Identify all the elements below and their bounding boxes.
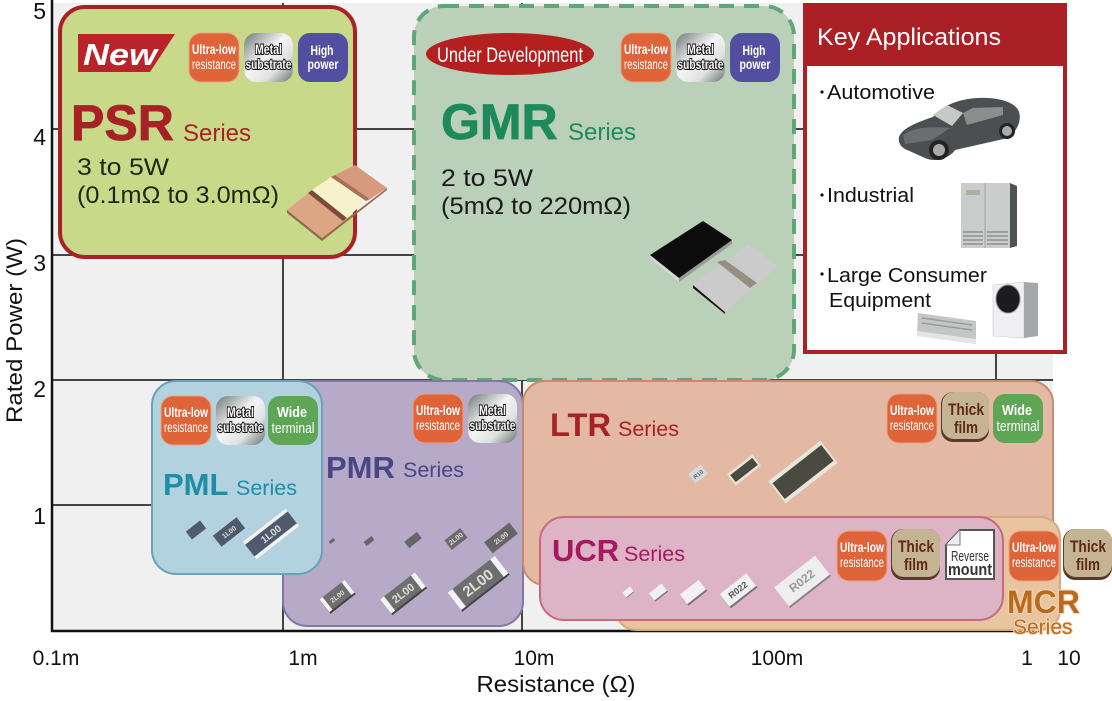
- badge: wide terminal: terminal: [996, 418, 1040, 435]
- x axis tick labels: 0.1m: [33, 647, 79, 670]
- text: GMR ratings: [441, 165, 631, 220]
- badge: ultra-low resistance: Ultra-low: [416, 403, 460, 418]
- panel: PML series: [152, 381, 322, 574]
- badge: metal substrate: substrate: [470, 418, 516, 433]
- y axis tick labels: 3: [33, 250, 46, 276]
- badge: high power: High: [310, 43, 334, 58]
- panel: PSR series: [60, 7, 387, 257]
- y axis title: Rated Power (W): [2, 238, 27, 423]
- heading: LTR Series: [550, 407, 679, 443]
- image: PMR chips: 2L00: [448, 532, 465, 547]
- image: PMR chips: 2L00: [460, 566, 497, 601]
- text: industrial: Industrial: [827, 184, 914, 207]
- badge: reverse mount: [946, 530, 994, 579]
- heading: GMR Series: [441, 94, 636, 150]
- text: large consumer equipment: [820, 264, 987, 312]
- image: PML chips: 1L00: [259, 523, 284, 546]
- panel: LTR series: [523, 381, 1053, 585]
- text: automotive: Automotive: [827, 81, 935, 104]
- image: GMR components: [650, 221, 778, 314]
- badge: ultra-low resistance: [413, 394, 463, 443]
- heading: PSR Series: PSR: [71, 95, 174, 151]
- badge: ultra-low resistance: [1009, 531, 1059, 581]
- badge: ultra-low resistance: [887, 394, 937, 443]
- badge: ultra-low resistance: Ultra-low: [1012, 540, 1056, 555]
- heading: GMR Series: Series: [568, 119, 636, 146]
- icon: washing machine: [993, 282, 1038, 338]
- heading: GMR Series: GMR: [441, 94, 558, 150]
- heading: LTR Series: Series: [618, 417, 679, 441]
- heading: PSR Series: Series: [183, 120, 251, 147]
- badge: wide terminal: [268, 396, 318, 445]
- panel: MCR series: [616, 517, 1112, 639]
- text: PSR ratings: 3 to 5W: [77, 154, 169, 181]
- image: UCR chips: [622, 556, 831, 608]
- heading: MCR Series: Series: [1013, 616, 1073, 639]
- x axis tick labels: 1: [1021, 647, 1033, 670]
- badge: high power: power: [308, 57, 339, 72]
- heading: MCR Series: [1007, 584, 1080, 639]
- heading: MCR Series: MCR: [1007, 584, 1080, 620]
- image: LTR chips: [688, 441, 838, 503]
- icon: air conditioner: [917, 313, 976, 344]
- heading: PML Series: PML: [163, 467, 228, 502]
- badge: metal substrate: [676, 33, 725, 82]
- badge: wide terminal: Wide: [1002, 402, 1032, 419]
- heading: PMR Series: PMR: [326, 450, 395, 485]
- y axis tick labels: 2: [33, 376, 46, 402]
- badge: ultra-low resistance: Ultra-low: [164, 405, 208, 420]
- heading: PML Series: Series: [236, 476, 297, 500]
- badge: metal substrate: [244, 33, 293, 82]
- image: PML chips: 1L00: [221, 525, 238, 540]
- image: PMR chips: 2L00: [493, 531, 510, 546]
- text: PSR ratings: [77, 154, 279, 209]
- y axis tick labels: [33, 0, 46, 529]
- badge: ultra-low resistance: [189, 33, 239, 82]
- badge: wide terminal: [993, 394, 1043, 443]
- badge: New: [78, 34, 175, 72]
- image: LTR chips: R10: [693, 469, 706, 481]
- badge: metal substrate: Metal: [227, 405, 254, 420]
- badge: high power: [730, 33, 780, 82]
- heading: UCR Series: Series: [624, 542, 685, 566]
- badge: high power: High: [742, 43, 766, 58]
- badge: metal substrate: substrate: [246, 57, 292, 72]
- badge: ultra-low resistance: resistance: [164, 420, 208, 435]
- badge: ultra-low resistance: resistance: [840, 555, 884, 570]
- heading: LTR Series: LTR: [550, 407, 611, 443]
- badge: metal substrate: Metal: [479, 403, 506, 418]
- heading: PML Series: [163, 467, 297, 502]
- badge: thick film: Thick: [948, 400, 984, 419]
- heading: key applications: Key Applications: [817, 24, 1001, 51]
- badge: thick film: film: [954, 418, 978, 437]
- badge: reverse mount: mount: [948, 560, 992, 579]
- badge: ultra-low resistance: resistance: [890, 418, 934, 433]
- text: large consumer equipment: Large Consumer: [827, 264, 987, 287]
- panel: GMR series: [414, 6, 794, 380]
- heading: PSR Series: [71, 95, 251, 151]
- badge: ultra-low resistance: resistance: [416, 418, 460, 433]
- badge: metal substrate: Metal: [687, 42, 714, 57]
- x axis tick labels: [33, 647, 1081, 670]
- chart axes: [52, 0, 1040, 631]
- badge: wide terminal: Wide: [277, 404, 307, 421]
- text: GMR ratings: (5mΩ to 220mΩ): [441, 193, 631, 220]
- badge: ultra-low resistance: [621, 33, 671, 82]
- text: GMR ratings: 2 to 5W: [441, 165, 533, 192]
- x axis tick labels: 1m: [288, 647, 318, 670]
- y axis tick labels: 4: [33, 124, 46, 150]
- badge: thick film: [1063, 529, 1112, 580]
- badge: ultra-low resistance: Ultra-low: [624, 42, 668, 57]
- image: PML chips: [186, 509, 299, 559]
- badge: under development: [426, 33, 594, 75]
- badge: ultra-low resistance: Ultra-low: [192, 42, 236, 57]
- badge: ultra-low resistance: Ultra-low: [890, 403, 934, 418]
- image: PSR component: [287, 165, 387, 241]
- badge: ultra-low resistance: [161, 396, 211, 445]
- badge: ultra-low resistance: resistance: [192, 57, 236, 72]
- badge: ultra-low resistance: resistance: [624, 57, 668, 72]
- badge: high power: power: [740, 57, 771, 72]
- image: UCR chips: R022: [786, 566, 818, 595]
- badge: ultra-low resistance: Ultra-low: [840, 540, 884, 555]
- heading: PMR Series: [326, 450, 464, 485]
- image: PMR chips: 2L00: [390, 581, 417, 606]
- badge: metal substrate: Metal: [255, 42, 282, 57]
- heading: UCR Series: [552, 533, 685, 568]
- header band: [803, 3, 1066, 66]
- y axis tick labels: 1: [33, 503, 46, 529]
- badge: metal substrate: [216, 396, 265, 445]
- badge: metal substrate: [468, 394, 517, 443]
- panel: UCR series: [540, 517, 1003, 620]
- badge: high power: [298, 33, 348, 82]
- panel: PMR series: [283, 381, 523, 626]
- x axis tick labels: 100m: [751, 647, 803, 670]
- heading: PMR Series: Series: [403, 458, 464, 482]
- badge: New: New: [83, 37, 159, 72]
- badge: wide terminal: terminal: [272, 420, 314, 437]
- heading: UCR Series: UCR: [552, 533, 619, 568]
- badge: thick film: Thick: [898, 537, 934, 556]
- image: PMR chips: [319, 523, 518, 615]
- panel: key applications: [803, 3, 1066, 352]
- image: UCR chips: R022: [726, 579, 750, 601]
- image: PMR chips: 2L00: [329, 589, 346, 605]
- text: PSR ratings: (0.1mΩ to 3.0mΩ): [77, 182, 279, 209]
- x axis tick labels: 10: [1057, 647, 1081, 670]
- x axis tick labels: 10m: [514, 647, 554, 670]
- badge: ultra-low resistance: [837, 531, 887, 581]
- x axis title: Resistance (Ω): [476, 671, 636, 697]
- badge: under development: Under Development: [437, 44, 583, 67]
- badge: thick film: film: [904, 555, 928, 574]
- badge: reverse mount: Reverse: [951, 548, 989, 565]
- icon: industrial cabinet: [961, 183, 1017, 248]
- icon: car: [899, 98, 1020, 160]
- badge: ultra-low resistance: resistance: [1012, 555, 1056, 570]
- badge: thick film: film: [1076, 555, 1100, 574]
- badge: thick film: [891, 529, 940, 580]
- badge: metal substrate: substrate: [218, 420, 264, 435]
- text: large consumer equipment: Equipment: [829, 289, 931, 312]
- badge: metal substrate: substrate: [678, 57, 724, 72]
- badge: thick film: [941, 392, 989, 442]
